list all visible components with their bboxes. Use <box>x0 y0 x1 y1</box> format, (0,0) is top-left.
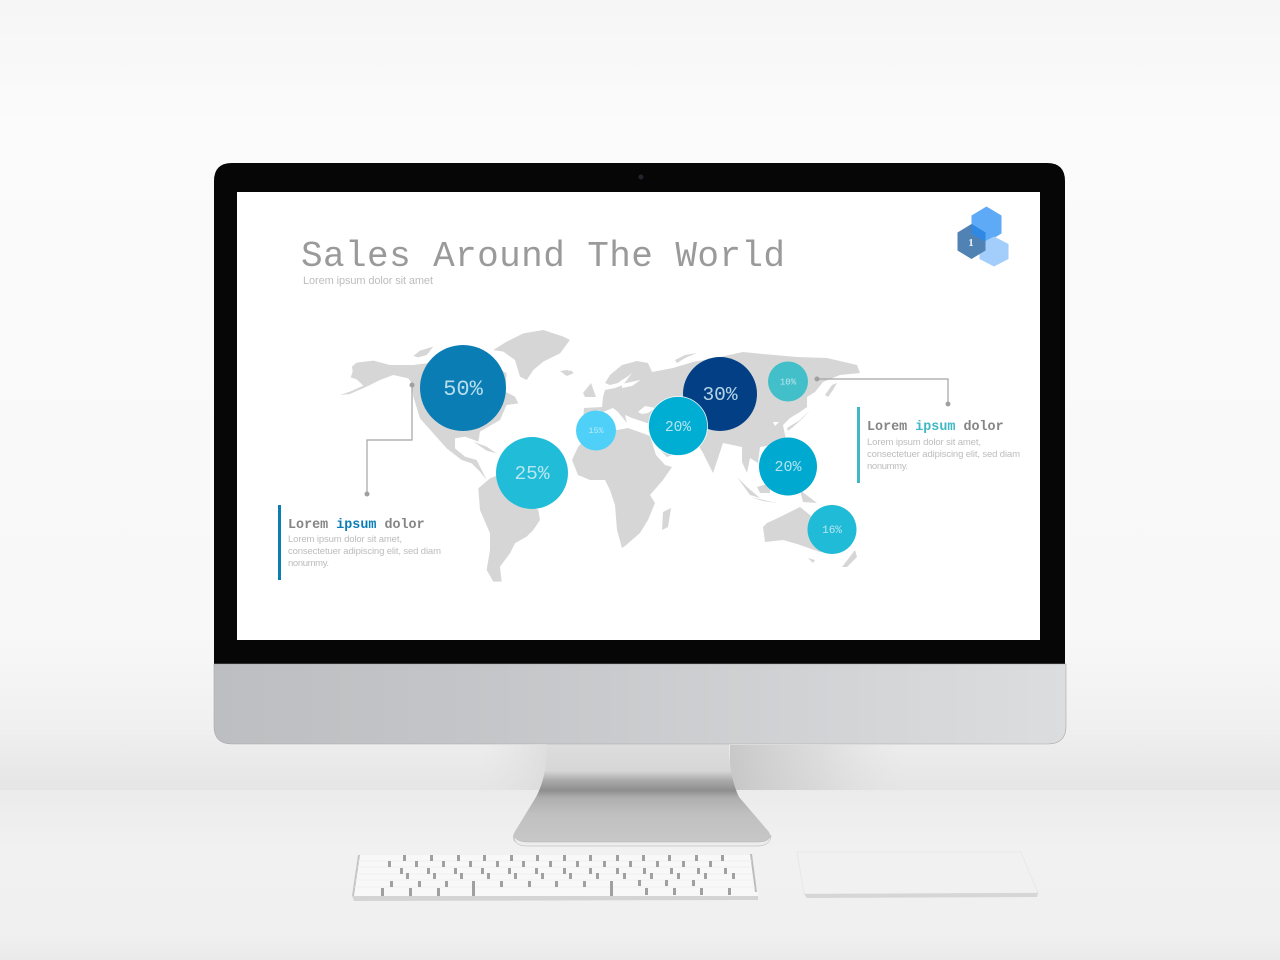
callout: left <box>278 505 441 580</box>
bubble: 50% <box>420 345 506 431</box>
monitor body <box>214 163 1066 744</box>
monitor chin <box>214 664 1066 744</box>
bubble: 10% <box>768 362 808 402</box>
map: Africa <box>572 428 672 548</box>
icon: hexagons with number 1: 1 <box>968 238 974 249</box>
map: Eurasia <box>583 352 860 473</box>
bubble: 30% <box>683 357 757 431</box>
subtitle: Lorem ipsum dolor sit amet <box>303 275 433 287</box>
connector: right callout <box>814 376 950 406</box>
bubble: 20% East Asia <box>759 438 817 496</box>
callout: left: consectetuer adipiscing elit, sed diam <box>288 546 441 557</box>
bubble: 25%: 25% <box>514 463 550 485</box>
screen <box>237 192 1040 640</box>
callout: left: Lorem ipsum dolor sit amet, <box>288 534 402 545</box>
bubble: 20% East Asia: 20% <box>774 459 802 476</box>
world map <box>340 330 860 582</box>
bubble: 16% <box>808 505 856 554</box>
bubble: 30%: 30% <box>702 384 738 406</box>
monitor bezel <box>214 163 1065 665</box>
callout: right: consectetuer adipiscing elit, sed diam <box>867 449 1020 460</box>
map: Americas and Greenland <box>340 330 573 582</box>
callout: right <box>857 407 1020 483</box>
callout: right: Lorem ipsum dolor <box>867 420 1004 435</box>
icon: hexagons with number 1 <box>958 206 1008 266</box>
map: inland seas <box>622 378 779 458</box>
connector: left callout <box>364 382 414 496</box>
webcam <box>638 174 644 180</box>
trackpad <box>797 852 1038 898</box>
title: Sales Around The World <box>301 236 785 277</box>
bubble: 15% <box>576 410 616 450</box>
bubble: 15%: 15% <box>588 426 605 436</box>
bubble: 50%: 50% <box>443 377 484 402</box>
monitor stand <box>513 742 771 846</box>
keyboard <box>352 854 758 901</box>
callout: left: Lorem ipsum dolor <box>288 518 425 533</box>
bubble: 16%: 16% <box>822 525 842 537</box>
callout: right: nonummy. <box>867 461 908 472</box>
map: islands and Oceania <box>560 353 857 567</box>
callout: left: nonummy. <box>288 558 329 569</box>
bubble: 10%: 10% <box>780 378 797 388</box>
bubble: 20% Middle East: 20% <box>665 420 691 436</box>
bubble: 20% Middle East <box>648 396 708 456</box>
bubble: 25% <box>496 437 568 509</box>
callout: right: Lorem ipsum dolor sit amet, <box>867 437 981 448</box>
